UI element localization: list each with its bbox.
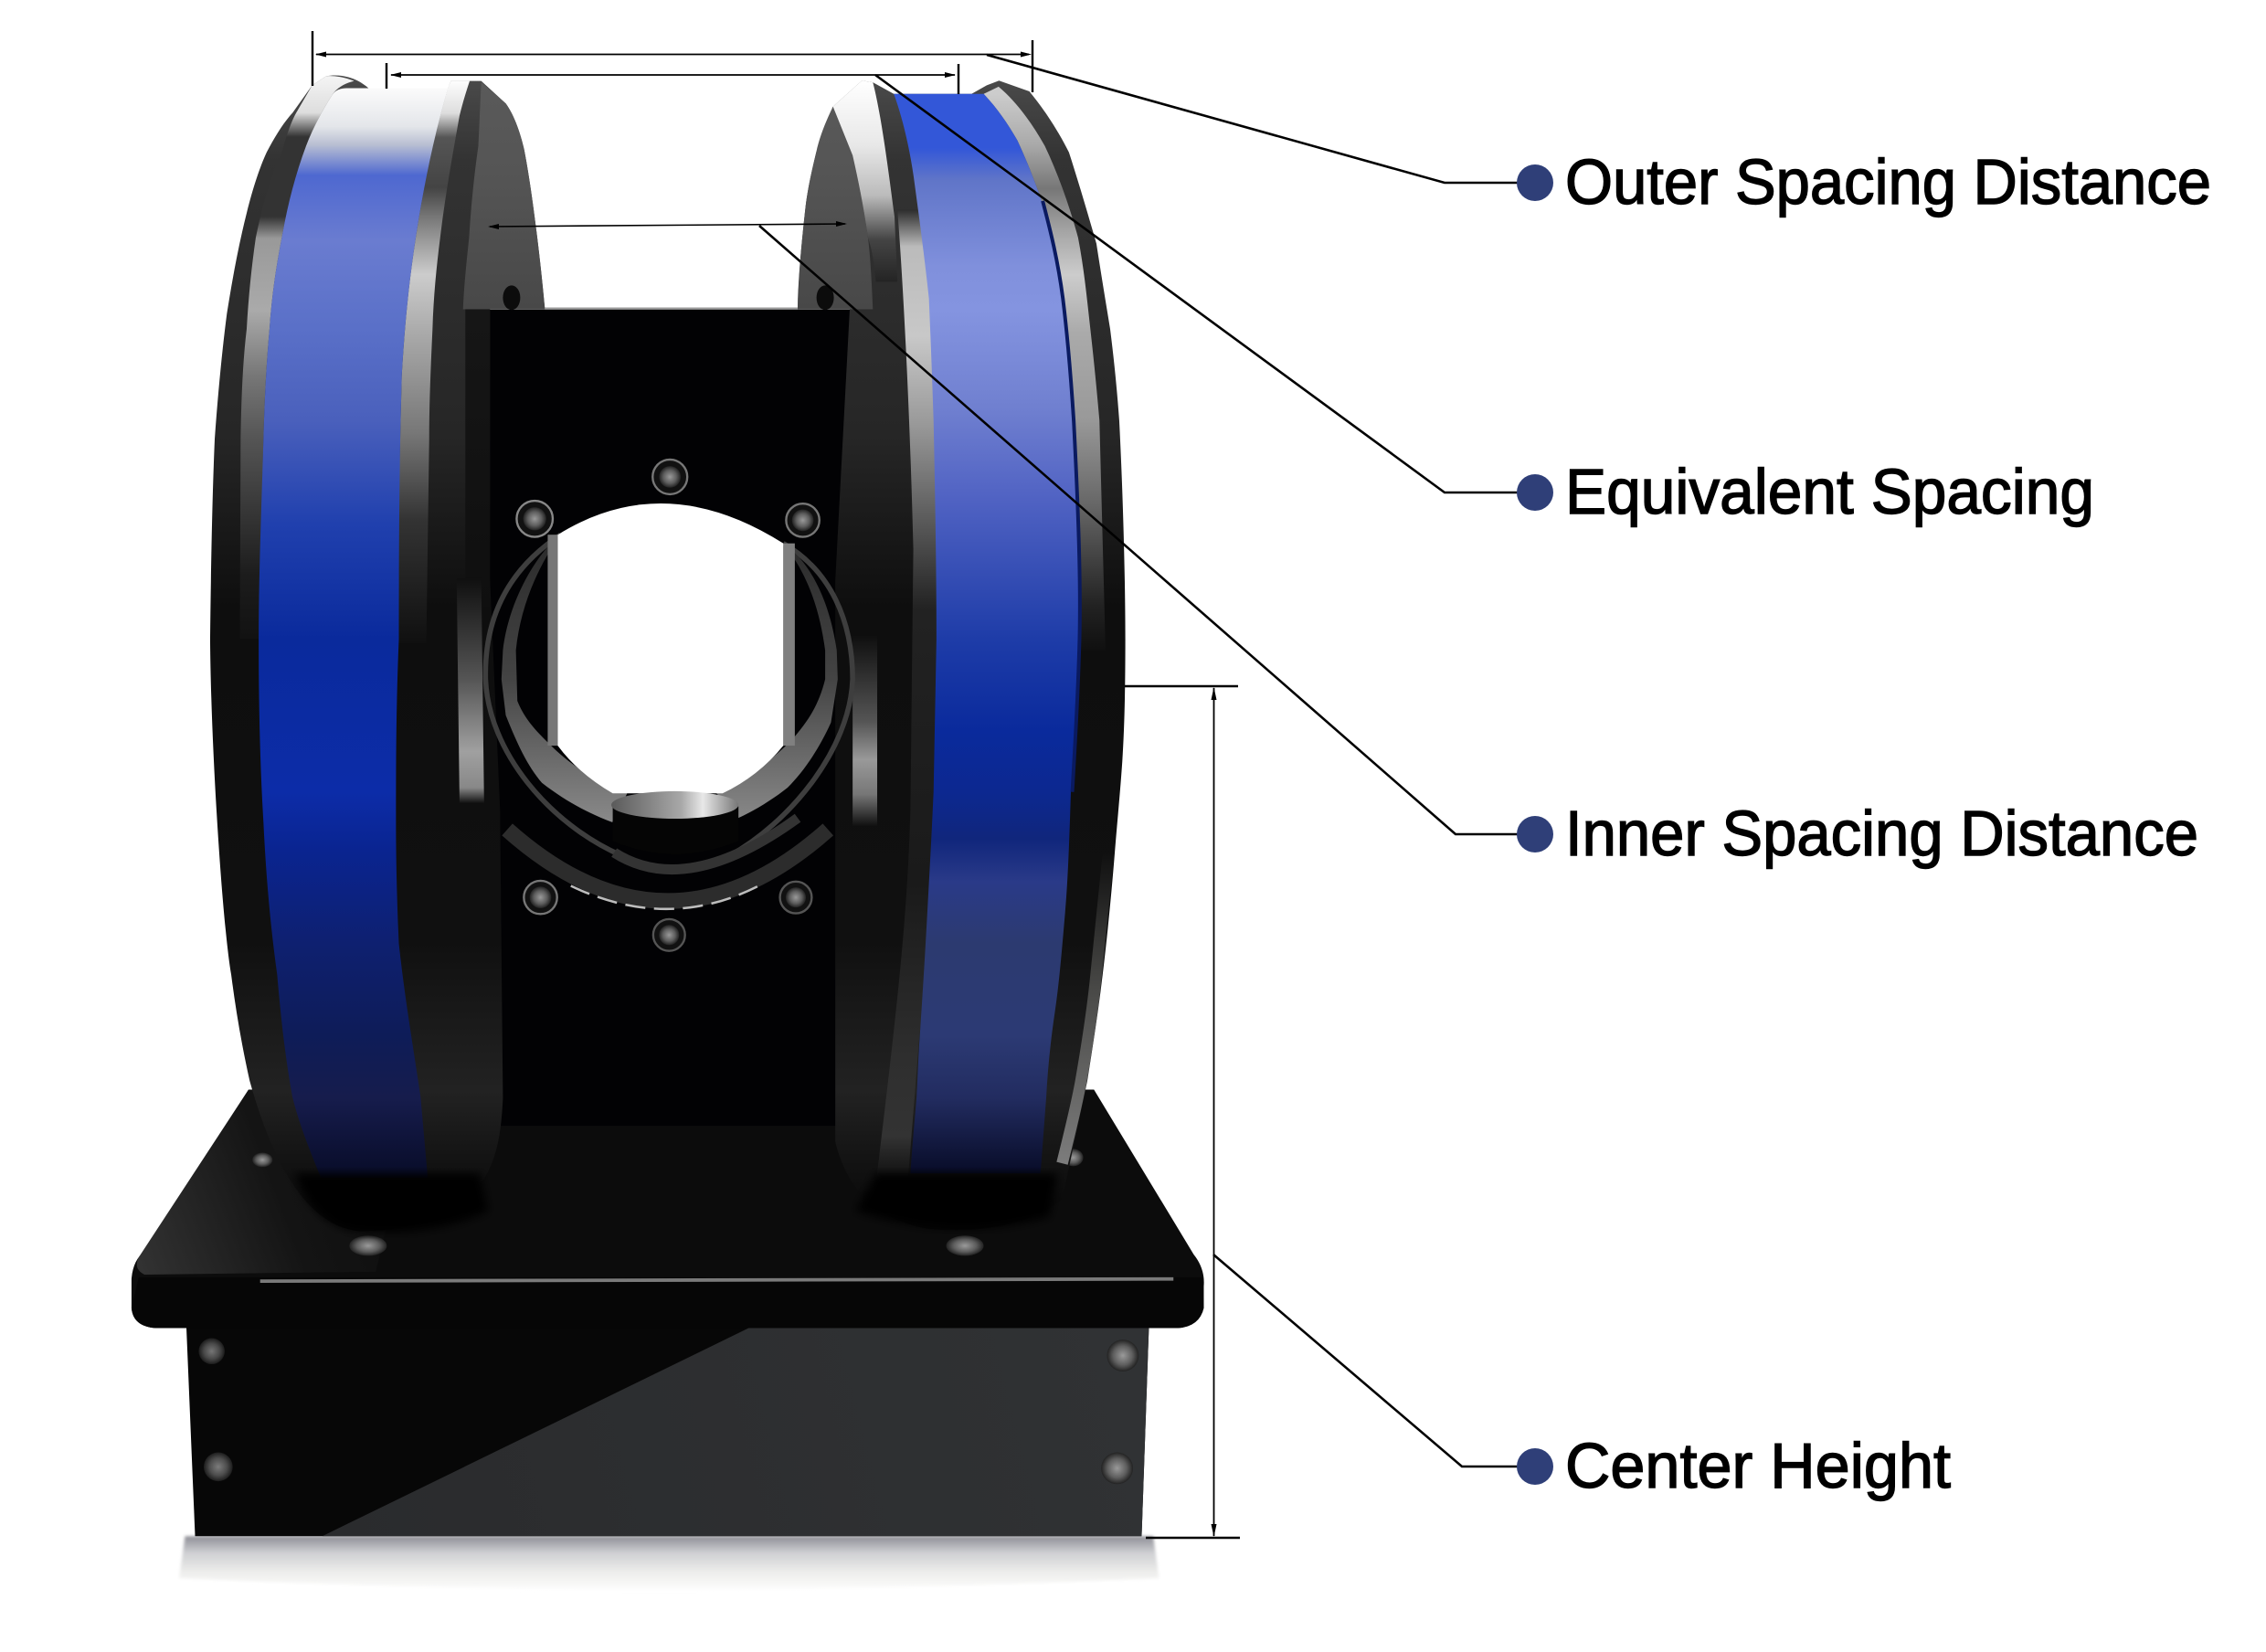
base plate	[132, 1090, 1204, 1328]
left plate-edge highlight	[457, 578, 484, 803]
product photo: coil assembly	[132, 75, 1204, 1590]
ring right band	[715, 544, 838, 818]
callout: center height: Center Height	[1565, 1430, 1951, 1501]
callout: outer spacing distance: Outer Spacing Distance	[1565, 146, 2211, 217]
left coil lower shadow	[295, 1173, 489, 1233]
right coil winding dark edge	[1043, 201, 1080, 792]
callout: inner spacing distance: Inner Spacing Distance	[1565, 798, 2198, 869]
left coil inner face	[463, 82, 545, 309]
callout: equivalent spacing: Equivalent Spacing	[1565, 456, 2094, 527]
alignment puck	[611, 791, 738, 854]
ring outer arcs	[485, 535, 621, 855]
right coil lower edge	[1062, 852, 1108, 1163]
center support plate	[462, 308, 852, 1126]
right coil	[798, 80, 1126, 1230]
left coil blue winding	[259, 88, 448, 1178]
callout: outer spacing distance	[987, 55, 2211, 217]
left coil outer flange highlight	[240, 76, 354, 639]
right coil band beside winding	[875, 209, 939, 1185]
dimension: equivalent spacing	[386, 63, 958, 94]
floor shadow	[179, 1536, 1159, 1590]
dimension: outer spacing	[312, 31, 1032, 92]
lower bracket arc	[507, 830, 828, 909]
right coil lower shadow	[855, 1173, 1058, 1229]
ring left band	[502, 535, 627, 822]
plate aperture	[485, 460, 852, 951]
right coil inner face	[798, 107, 873, 309]
base box	[186, 1328, 1149, 1536]
left coil side plate edge	[465, 309, 490, 607]
callout: center height	[1213, 1255, 1951, 1501]
left coil inner flange highlight	[397, 81, 470, 643]
dimension: center height	[1125, 686, 1240, 1538]
left coil	[210, 75, 545, 1233]
right plate-edge highlight	[852, 636, 877, 827]
plate screws	[516, 460, 820, 951]
side strips	[547, 535, 559, 746]
right coil outer band	[984, 87, 1106, 651]
callout: equivalent spacing	[875, 75, 2094, 527]
callout: inner spacing distance	[759, 226, 2198, 869]
right coil blue winding	[894, 94, 1078, 1173]
inner cable sweep	[614, 818, 798, 870]
right coil body	[798, 80, 1126, 1230]
dimension: inner spacing	[488, 221, 847, 229]
right coil front flange highlight	[833, 80, 897, 281]
left coil body	[210, 75, 545, 1232]
aperture opening	[557, 503, 783, 793]
